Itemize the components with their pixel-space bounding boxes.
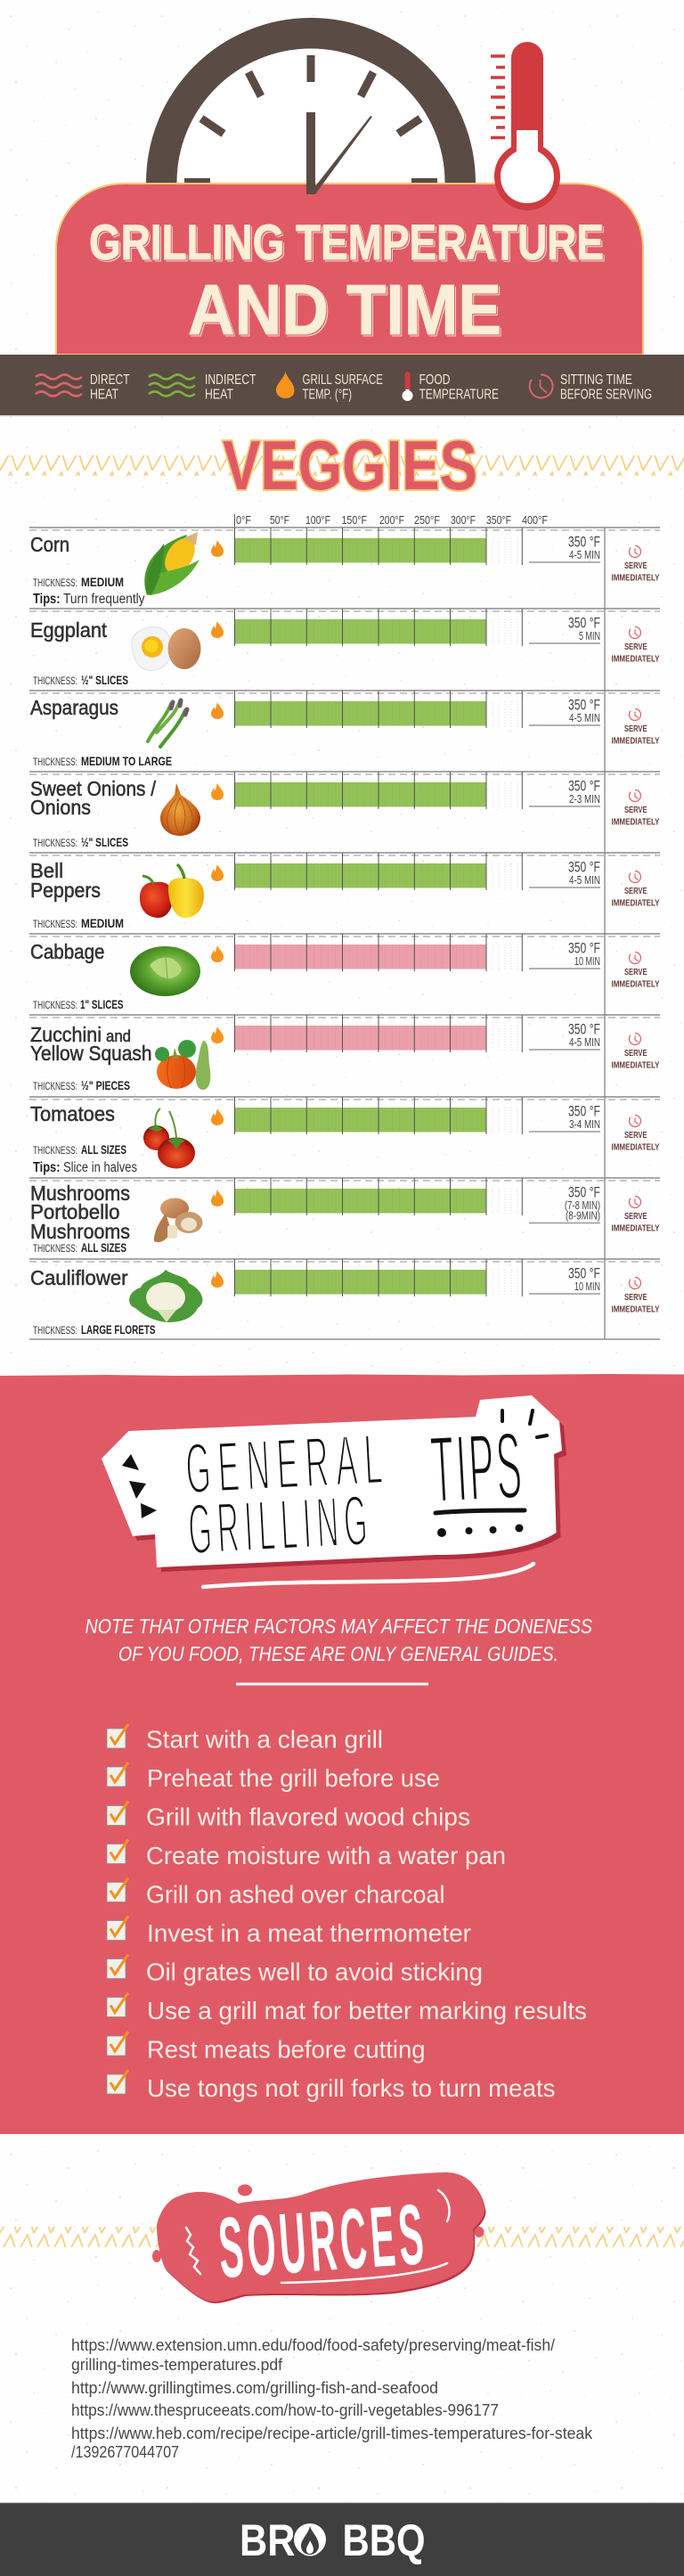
checklist: Grill on ashed over charcoal <box>146 1880 445 1909</box>
thickness: THICKNESS: <box>33 1080 77 1092</box>
logo: BBQ <box>342 2515 426 2565</box>
legend: sitting time: BEFORE SERVING <box>560 387 652 403</box>
footer <box>0 2502 684 2576</box>
row: zucchini and yellow squash <box>29 1015 660 1092</box>
icon: flame <box>211 1271 224 1288</box>
legend: grill surface temperature <box>276 372 383 403</box>
row: sweet onions <box>29 772 660 849</box>
tip: Slice in halves <box>63 1160 137 1175</box>
temperature and time: 350 °F <box>568 615 600 631</box>
heat bar <box>235 691 522 728</box>
temperature and time: 10 MIN <box>574 1280 600 1293</box>
heat bar <box>235 1015 522 1052</box>
thickness: THICKNESS: <box>33 837 77 849</box>
temperature and time <box>529 697 600 725</box>
section heading: sources <box>0 2172 684 2303</box>
thickness <box>33 1143 126 1157</box>
source links: grilling-times-temperatures.pdf <box>71 2356 283 2374</box>
temperature and time: 5 MIN <box>579 630 600 642</box>
row: mushrooms <box>29 1178 660 1255</box>
temperature and time <box>529 1183 600 1223</box>
sitting time <box>611 1034 659 1071</box>
sitting time <box>611 709 659 747</box>
checklist: Oil grates well to avoid sticking <box>146 1959 483 1985</box>
note <box>86 1615 593 1665</box>
label: mushrooms: Mushrooms <box>30 1220 130 1243</box>
heat bar <box>235 853 522 890</box>
temperature and time <box>529 1265 600 1294</box>
temperature and time: 4-5 MIN <box>569 712 600 724</box>
checklist: Use a grill mat for better marking results <box>147 1997 587 2024</box>
thickness: THICKNESS: <box>33 1144 77 1157</box>
legend: sitting time: SITTING TIME <box>560 372 632 388</box>
sitting time: SERVE <box>624 1048 647 1059</box>
temperature and time: 350 °F <box>568 1265 600 1281</box>
thickness <box>33 998 123 1011</box>
thickness: THICKNESS: <box>33 999 77 1011</box>
label: bell peppers: Peppers <box>30 879 101 902</box>
heat bar <box>235 934 522 971</box>
icon: bell peppers <box>140 864 204 918</box>
legend: sitting time <box>530 372 652 403</box>
label: zucchini and yellow squash <box>30 1023 151 1065</box>
label: mushrooms <box>30 1182 130 1243</box>
icon: onion <box>160 783 200 836</box>
temperature axis: 150°F <box>342 513 367 527</box>
label: sweet onions: Sweet Onions / <box>30 777 157 800</box>
logo <box>240 2515 426 2565</box>
heading text <box>183 1413 526 1570</box>
thickness <box>33 576 124 589</box>
thickness: THICKNESS: <box>33 918 77 930</box>
heading text: GRILLING <box>186 1481 375 1570</box>
temperature and time: 10 MIN <box>574 955 600 968</box>
thickness: ALL SIZES <box>81 1241 126 1255</box>
row: asparagus <box>29 691 660 768</box>
temperature and time <box>529 533 600 562</box>
clock hands <box>306 112 372 194</box>
thickness <box>33 1241 126 1255</box>
sitting time <box>611 871 659 909</box>
temperature and time: 3-4 MIN <box>569 1118 600 1131</box>
legend: food temperature <box>403 372 499 403</box>
heading badge <box>102 1395 566 1572</box>
tip <box>33 1160 137 1175</box>
heat bar <box>235 609 522 646</box>
label: bell peppers: Bell <box>30 859 63 882</box>
thickness <box>33 917 124 930</box>
title: AND TIME <box>188 270 501 349</box>
sitting time: SERVE <box>624 967 647 977</box>
heat bar <box>235 527 522 565</box>
sitting time: IMMEDIATELY <box>611 654 659 665</box>
sitting time: IMMEDIATELY <box>611 1142 659 1153</box>
temperature and time: 350 °F <box>568 1103 600 1119</box>
temperature and time <box>529 1103 600 1132</box>
heat bar <box>235 772 522 809</box>
temperature and time: (8-9MIN) <box>566 1210 600 1223</box>
label: zucchini and yellow squash: Zucchini <box>30 1023 102 1046</box>
icon: flame <box>211 864 224 881</box>
sitting time: IMMEDIATELY <box>611 816 659 827</box>
heat bar <box>235 1097 522 1134</box>
sitting time: SERVE <box>624 1130 647 1141</box>
sitting time: SERVE <box>624 1292 647 1303</box>
temperature axis: 350°F <box>486 513 511 527</box>
source links: https://www.heb.com/recipe/recipe-article/grill-times-temperatures-for-steak <box>71 2425 593 2442</box>
row: eggplant <box>29 609 660 687</box>
heading text: GENERAL <box>183 1419 391 1509</box>
thickness: THICKNESS: <box>33 1242 77 1255</box>
temperature and time: 350 °F <box>568 1021 600 1037</box>
legend: indirect heat: HEAT <box>205 387 233 403</box>
checklist: Start with a clean grill <box>146 1725 383 1754</box>
thickness <box>33 1323 155 1337</box>
icon: flame <box>211 702 224 719</box>
sitting time: IMMEDIATELY <box>611 572 659 583</box>
thickness: THICKNESS: <box>33 577 77 589</box>
icon: flame <box>211 783 224 800</box>
thickness: ½" PIECES <box>81 1079 130 1092</box>
sitting time: IMMEDIATELY <box>611 736 659 747</box>
swoosh <box>203 1564 533 1587</box>
legend band <box>0 355 684 417</box>
title panel <box>56 184 643 355</box>
thickness: MEDIUM <box>81 576 124 589</box>
note: OF YOU FOOD, THESE ARE ONLY GENERAL GUIDES. <box>118 1642 558 1665</box>
temperature and time: (7-8 MIN) <box>565 1199 600 1212</box>
source links: /1392677044707 <box>71 2443 179 2461</box>
legend: food temperature: FOOD <box>419 372 451 388</box>
label: zucchini and yellow squash: and <box>106 1027 131 1045</box>
sitting time: SERVE <box>624 886 647 896</box>
label: corn: Corn <box>30 533 69 556</box>
source links: https://www.extension.umn.edu/food/food-safety/preserving/meat-fish/ <box>71 2336 555 2354</box>
icon: flame <box>211 945 224 962</box>
checklist: Preheat the grill before use <box>147 1764 440 1792</box>
temperature and time <box>529 939 600 969</box>
source links <box>71 2336 593 2461</box>
tip <box>33 592 145 607</box>
temperature axis: 50°F <box>270 513 289 527</box>
logo: BRO <box>240 2515 325 2565</box>
badge doodles <box>122 1411 547 1537</box>
tip: Tips: <box>33 592 61 607</box>
heading text: TIPS <box>428 1413 526 1524</box>
temperature and time: 350 °F <box>568 859 600 875</box>
thickness: MEDIUM <box>81 917 124 930</box>
thickness <box>33 755 172 768</box>
checklist: Use tongs not grill forks to turn meats <box>147 2074 556 2102</box>
temperature axis: 200°F <box>379 513 404 527</box>
label: asparagus: Asparagus <box>30 696 118 719</box>
icon: flame <box>211 621 224 638</box>
row: bell peppers <box>29 853 660 930</box>
sitting time: IMMEDIATELY <box>611 898 659 909</box>
sitting time: IMMEDIATELY <box>611 1060 659 1071</box>
legend: indirect heat: INDIRECT <box>205 372 256 388</box>
label: mushrooms: Mushrooms <box>30 1182 130 1205</box>
row: tomatoes <box>29 1097 660 1175</box>
thickness <box>33 674 128 687</box>
temperature and time: 4-5 MIN <box>569 1036 600 1049</box>
temperature and time: 4-5 MIN <box>569 874 600 887</box>
temperature and time <box>529 1021 600 1050</box>
heat bar <box>235 1178 522 1215</box>
checklist: Create moisture with a water pan <box>146 1842 506 1869</box>
sitting time <box>611 1278 659 1315</box>
legend: direct heat <box>36 372 130 403</box>
sitting time: IMMEDIATELY <box>611 978 659 989</box>
legend: grill surface temperature: GRILL SURFACE <box>303 372 383 388</box>
checklist: Invest in a meat thermometer <box>147 1919 471 1947</box>
thickness: 1" SLICES <box>80 998 123 1011</box>
thickness <box>33 1079 130 1092</box>
temperature and time: 350 °F <box>568 533 600 551</box>
section heading: veggies: VEGGIES <box>223 426 477 504</box>
tip: Turn frequently <box>63 592 145 607</box>
icon: thermometer <box>491 42 560 210</box>
temperature and time: 350 °F <box>568 777 600 795</box>
sitting time: SERVE <box>624 1211 647 1222</box>
sitting time <box>611 545 659 583</box>
temperature and time: 350 °F <box>568 697 600 713</box>
label: mushrooms: Portobello <box>30 1200 119 1223</box>
sitting time <box>611 952 659 989</box>
thickness: THICKNESS: <box>33 756 77 768</box>
legend: indirect heat <box>149 372 256 403</box>
temperature and time <box>529 615 600 643</box>
label: cauliflower: Cauliflower <box>30 1266 128 1289</box>
doodles <box>186 2190 450 2283</box>
checklist: Rest meats before cutting <box>147 2035 426 2064</box>
blob <box>152 2172 486 2303</box>
icon: flame <box>211 1190 224 1206</box>
temperature axis: 300°F <box>451 513 476 527</box>
sitting time <box>611 1196 659 1233</box>
temperature axis: 100°F <box>305 513 330 527</box>
legend: direct heat: DIRECT <box>90 372 130 388</box>
thickness: ½" SLICES <box>81 674 128 687</box>
label: cabbage: Cabbage <box>30 940 105 963</box>
row: corn <box>29 527 660 607</box>
legend: food temperature: TEMPERATURE <box>419 387 499 403</box>
source links: https://www.thespruceeats.com/how-to-grill-vegetables-996177 <box>71 2401 499 2419</box>
sitting time: SERVE <box>624 805 647 815</box>
icon: clock <box>146 18 476 184</box>
header illustration <box>56 18 643 355</box>
temperature axis: 250°F <box>414 513 440 527</box>
sitting time: IMMEDIATELY <box>611 1223 659 1233</box>
sitting time: IMMEDIATELY <box>611 1304 659 1315</box>
label: zucchini and yellow squash: Yellow Squash <box>30 1042 151 1065</box>
sitting time: SERVE <box>624 724 647 734</box>
icon: corn <box>144 532 201 595</box>
row: cauliflower <box>29 1259 660 1337</box>
heading text: SOURCES <box>216 2186 430 2296</box>
icon: flame <box>211 1108 224 1125</box>
source links: http://www.grillingtimes.com/grilling-fish-and-seafood <box>71 2379 438 2397</box>
thickness: ALL SIZES <box>81 1143 126 1157</box>
title <box>89 214 604 349</box>
sitting time <box>611 1116 659 1153</box>
temperature and time: 350 °F <box>568 1183 600 1201</box>
temperature axis: 0°F <box>236 513 251 527</box>
row: cabbage <box>29 934 660 1011</box>
legend: grill surface temperature: TEMP. (°F) <box>303 387 352 403</box>
temperature and time: 2-3 MIN <box>569 793 600 806</box>
icon: asparagus <box>148 700 187 747</box>
sitting time <box>611 789 659 827</box>
thickness: THICKNESS: <box>33 675 77 687</box>
icon: cauliflower <box>129 1270 202 1322</box>
section heading: veggies <box>0 426 684 504</box>
sitting time: SERVE <box>624 560 647 571</box>
temperature axis: 400°F <box>522 513 548 527</box>
thickness <box>33 836 128 849</box>
icon: flame <box>211 1026 224 1043</box>
thickness: LARGE FLORETS <box>81 1323 155 1337</box>
temperature and time: 4-5 MIN <box>569 549 600 561</box>
temperature and time <box>529 777 600 806</box>
icon: cabbage <box>130 946 200 996</box>
icon: flame <box>211 540 224 557</box>
heat bar <box>235 1259 522 1296</box>
checklist: Grill with flavored wood chips <box>146 1803 470 1830</box>
icon: tomatoes <box>143 1108 195 1169</box>
thickness: THICKNESS: <box>33 1324 77 1337</box>
temperature and time: 350 °F <box>568 939 600 957</box>
checklist <box>107 1724 587 2102</box>
icon: mushrooms <box>154 1198 203 1242</box>
label: sweet onions: Onions <box>30 796 91 819</box>
panel: general grilling tips <box>0 1374 684 2134</box>
thickness: MEDIUM TO LARGE <box>81 755 172 768</box>
label: sweet onions <box>30 777 157 819</box>
icon: squash <box>155 1040 210 1090</box>
icon: eggplant image <box>132 627 201 670</box>
legend: direct heat: HEAT <box>90 387 118 403</box>
sitting time <box>611 627 659 665</box>
label: eggplant: Eggplant <box>30 618 108 642</box>
tip: Tips: <box>33 1160 61 1175</box>
sitting time: SERVE <box>624 642 647 652</box>
thickness: ½" SLICES <box>81 836 128 849</box>
note: NOTE THAT OTHER FACTORS MAY AFFECT THE DONENESS <box>86 1615 593 1638</box>
temperature axis <box>235 513 548 527</box>
label: tomatoes: Tomatoes <box>30 1102 115 1125</box>
temperature and time <box>529 859 600 887</box>
label: bell peppers <box>30 859 101 902</box>
